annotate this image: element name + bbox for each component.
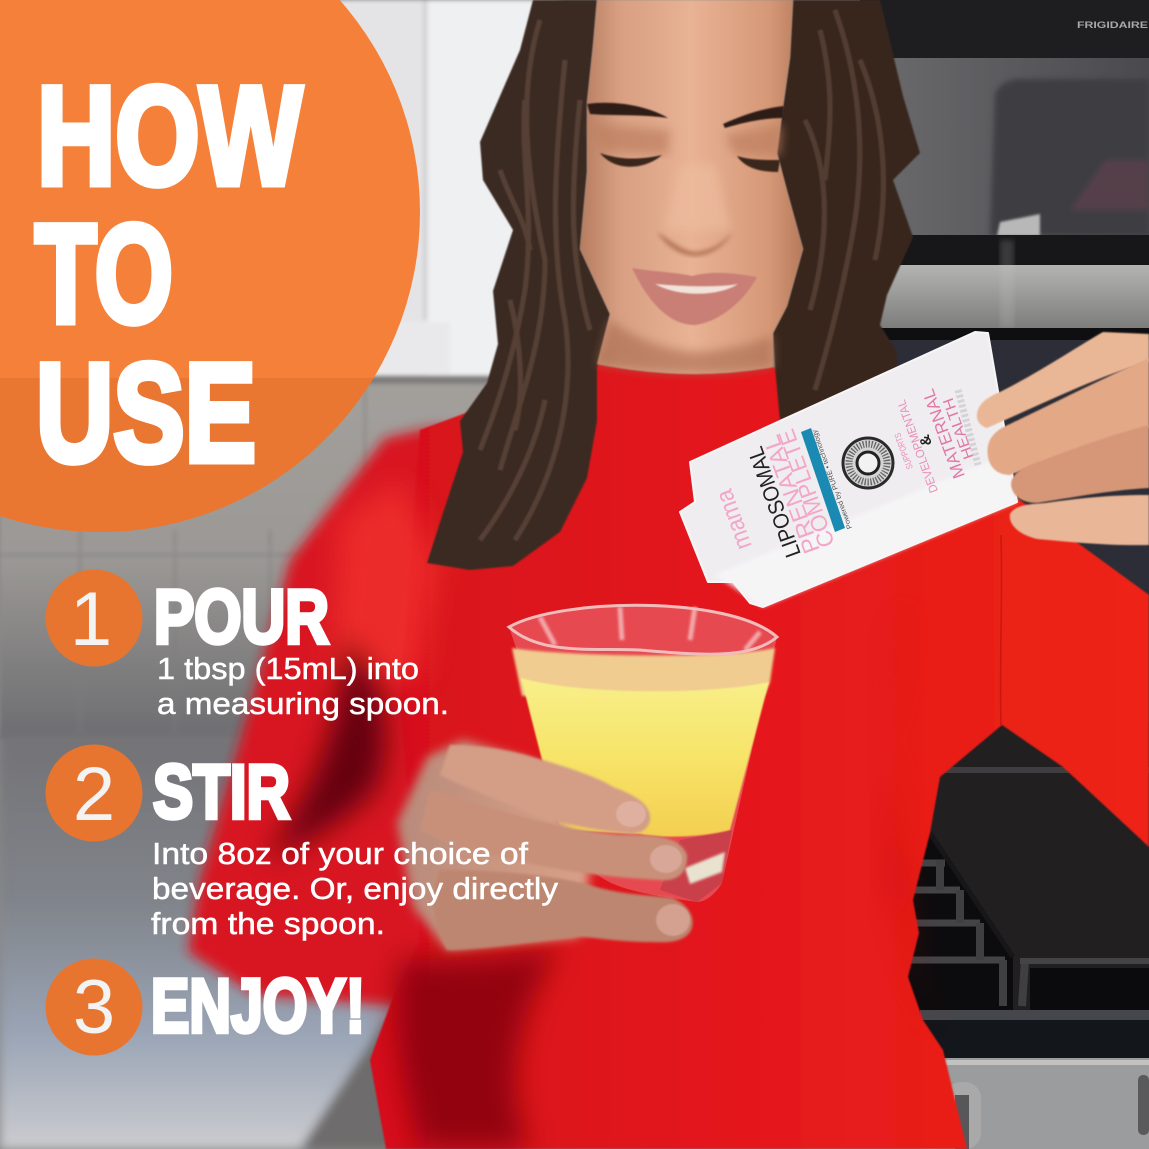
product name pink 2: COMPLETE <box>773 426 840 551</box>
product name pink 1: PRENATAL <box>758 432 825 557</box>
glass base <box>660 830 732 902</box>
product name black: LIPOSOMAL <box>743 443 806 561</box>
appliance label: FRIGIDAIRE <box>1077 20 1148 31</box>
glass body <box>509 605 777 902</box>
number badge 2: 2 <box>73 752 115 837</box>
finger 2 <box>420 790 687 880</box>
pouch shape <box>680 332 1017 607</box>
step 2 text: beverage. Or, enjoy directly <box>152 871 559 906</box>
developmental: DEVELOPMENTAL <box>894 398 941 495</box>
orange corner circle <box>0 0 430 538</box>
right side fold <box>888 600 935 1040</box>
finger 1 <box>977 332 1149 428</box>
thumb <box>1010 495 1149 545</box>
number badge 1 <box>46 570 142 666</box>
nail 1 <box>616 801 646 827</box>
number badge 2 <box>46 744 142 842</box>
number badge 3: 3 <box>73 965 115 1050</box>
step 2 text: Into 8oz of your choice of <box>152 836 528 871</box>
woman: hair right side <box>773 0 920 420</box>
logo circle <box>843 438 893 488</box>
number badge 1: 1 <box>70 577 112 662</box>
health: HEALTH <box>940 395 978 461</box>
teeth <box>655 284 738 294</box>
title: HOW TO USE <box>35 57 302 491</box>
bright sleeve highlight <box>330 480 440 680</box>
supports text: SUPPORTS <box>892 432 915 471</box>
juice <box>521 678 769 837</box>
finger 3 <box>433 870 693 950</box>
appliance: microwave <box>860 0 1149 740</box>
base highlight <box>685 852 725 884</box>
brand name: mama <box>710 486 758 554</box>
rim <box>509 605 777 654</box>
step 2 text: from the spoon. <box>151 906 385 941</box>
drinking glass with juice <box>509 605 777 902</box>
lower white band <box>715 455 1017 607</box>
eye left <box>600 153 662 167</box>
eye shadow left <box>590 125 670 155</box>
number badge 3 <box>46 958 142 1056</box>
step 1 text: a measuring spoon. <box>157 686 449 721</box>
elbow shadow <box>265 640 385 860</box>
eye right <box>737 156 780 172</box>
skin <box>580 0 803 374</box>
title line 3: USE <box>36 334 256 491</box>
title line 2: TO <box>35 195 173 352</box>
lips <box>632 268 757 325</box>
left hand holding glass <box>397 740 693 950</box>
torso and right arm <box>370 364 1149 1149</box>
heading ENJOY: ENJOY! <box>151 964 365 1049</box>
step 2 <box>46 744 559 941</box>
title line 1: HOW <box>37 57 302 214</box>
palm <box>397 740 590 950</box>
brow left <box>587 103 668 118</box>
finger 3 <box>1011 425 1149 503</box>
small claim: Powered by PURE • technology <box>811 428 854 530</box>
rim highlights <box>540 607 760 650</box>
tile wall <box>0 376 520 740</box>
heading POUR: POUR <box>154 575 329 660</box>
blue strip <box>801 428 845 532</box>
maternal: MATERNAL <box>919 386 969 481</box>
woman: face <box>580 0 803 374</box>
crimp seal <box>958 390 978 465</box>
torso shadow <box>397 945 560 1149</box>
nose shadow <box>657 232 733 256</box>
finger 1 <box>440 745 650 833</box>
right hand holding pouch <box>977 332 1149 545</box>
step 1 text <box>157 651 449 721</box>
step 2 text <box>151 836 559 941</box>
woman: red sweater <box>188 364 1149 1149</box>
left sleeve <box>188 428 520 1006</box>
nail 3 <box>656 904 690 936</box>
neck shadow <box>597 320 773 374</box>
finger 2 <box>987 358 1149 475</box>
eye shadow right <box>725 125 782 155</box>
stove <box>880 722 1149 1149</box>
brow right <box>723 106 784 128</box>
frost and foam <box>512 648 775 696</box>
heading STIR: STIR <box>153 750 290 835</box>
ampersand: & <box>916 432 936 448</box>
woman: hair left side <box>427 0 610 570</box>
nose highlight <box>665 165 730 230</box>
step 1 text: 1 tbsp (15mL) into <box>157 651 419 686</box>
countertop <box>0 735 420 1149</box>
nail 2 <box>650 845 682 873</box>
step 3 <box>46 958 365 1056</box>
step 1 <box>46 570 449 721</box>
supplement pouch <box>680 332 1017 607</box>
cabinets <box>0 0 560 380</box>
